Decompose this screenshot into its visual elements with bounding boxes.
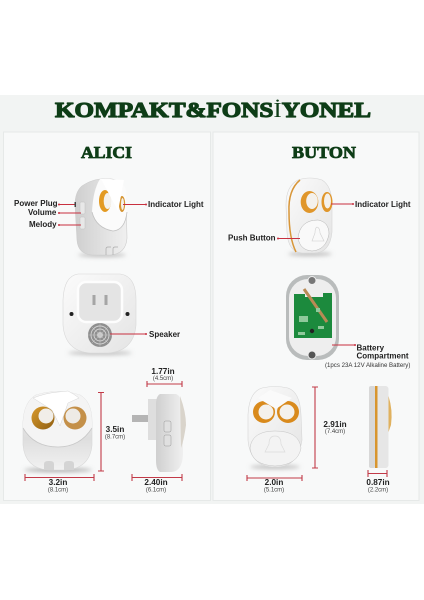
dimension: 1.77in: (4.5cm): [153, 376, 173, 382]
dimension: 0.87in: (2.2cm): [368, 488, 388, 494]
dimension: 2.0in: (5.1cm): [264, 488, 284, 494]
dimension: 0.87in: [366, 470, 390, 494]
dimension: 3.2in width: 3.2in: [49, 478, 67, 487]
dimension: 2.91in: 2.91in: [323, 420, 347, 429]
dimension: 2.0in: 2.0in: [265, 478, 283, 487]
labels: receiver side controls: Melody: [29, 220, 57, 229]
device: receiver back: [63, 274, 136, 355]
panel: ALICI: [4, 132, 210, 500]
label: Push Button: [228, 234, 300, 242]
device: button angled view: [286, 178, 332, 256]
label: Indicator Light: [331, 200, 411, 209]
label: Battery Compartment: Battery: [356, 344, 385, 352]
dimension: 2.91in: [312, 387, 347, 468]
label: Indicator Light: [123, 200, 204, 209]
title: KOMPAKT&FONS İYONEL: [55, 98, 371, 122]
device: button side: [369, 386, 392, 468]
label: Battery Compartment: (1pcs 23A 12V Alkaline Battery): [325, 362, 410, 369]
dimension: 3.2in width: (8.1cm): [48, 488, 68, 494]
label: Battery Compartment: [325, 344, 410, 369]
device: receiver front: [23, 391, 92, 472]
dimension: 2.91in: (7.4cm): [325, 429, 345, 435]
dimension: 3.5in height: [98, 392, 125, 471]
dimension: 3.5in height: 3.5in: [106, 425, 124, 434]
labels: receiver side controls: [14, 199, 81, 229]
device: button front: [248, 386, 302, 469]
label: Speaker: [110, 330, 180, 339]
device: receiver angled view: [75, 179, 127, 257]
heading: ALICI: ALICI: [81, 143, 132, 162]
dimension: 2.40in: 2.40in: [144, 478, 168, 487]
dimension: 2.0in: [247, 475, 302, 494]
labels: receiver side controls: Volume: [28, 208, 57, 217]
label: Indicator Light: Indicator Light: [355, 200, 411, 209]
label: Push Button: Push Button: [228, 234, 276, 242]
dimension: 2.40in: [132, 474, 182, 494]
dimension: 1.77in: [147, 367, 182, 387]
dimension: 1.77in: 1.77in: [151, 367, 175, 376]
label: Battery Compartment: Compartment: [356, 352, 409, 360]
heading: BUTON: BUTON: [292, 143, 357, 162]
panel: BUTON: [213, 132, 419, 500]
label: Speaker: Speaker: [149, 330, 180, 339]
labels: receiver side controls: Power Plug: [14, 199, 58, 208]
label: Indicator Light: Indicator Light: [148, 200, 204, 209]
device: receiver side: [132, 394, 186, 472]
dimension: 2.40in: (6.1cm): [146, 488, 166, 494]
dimension: 3.2in width: [25, 474, 94, 494]
dimension: 3.5in height: (8.7cm): [105, 434, 125, 440]
background band: [0, 95, 424, 504]
dimension: 0.87in: 0.87in: [366, 478, 390, 487]
device: open button with circuit board: [286, 275, 339, 360]
